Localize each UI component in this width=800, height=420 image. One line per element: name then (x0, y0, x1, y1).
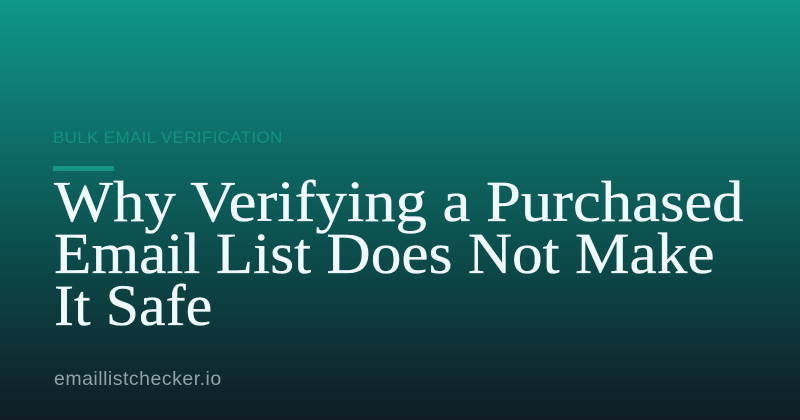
accent bar (53, 166, 114, 171)
title: It Safe (54, 272, 212, 338)
eyebrow label: BULK EMAIL VERIFICATION (53, 128, 283, 147)
site url: emaillistchecker.io (54, 368, 222, 390)
title (54, 168, 743, 338)
title: Email List Does Not Make (54, 220, 715, 286)
title: Why Verifying a Purchased (54, 168, 743, 234)
